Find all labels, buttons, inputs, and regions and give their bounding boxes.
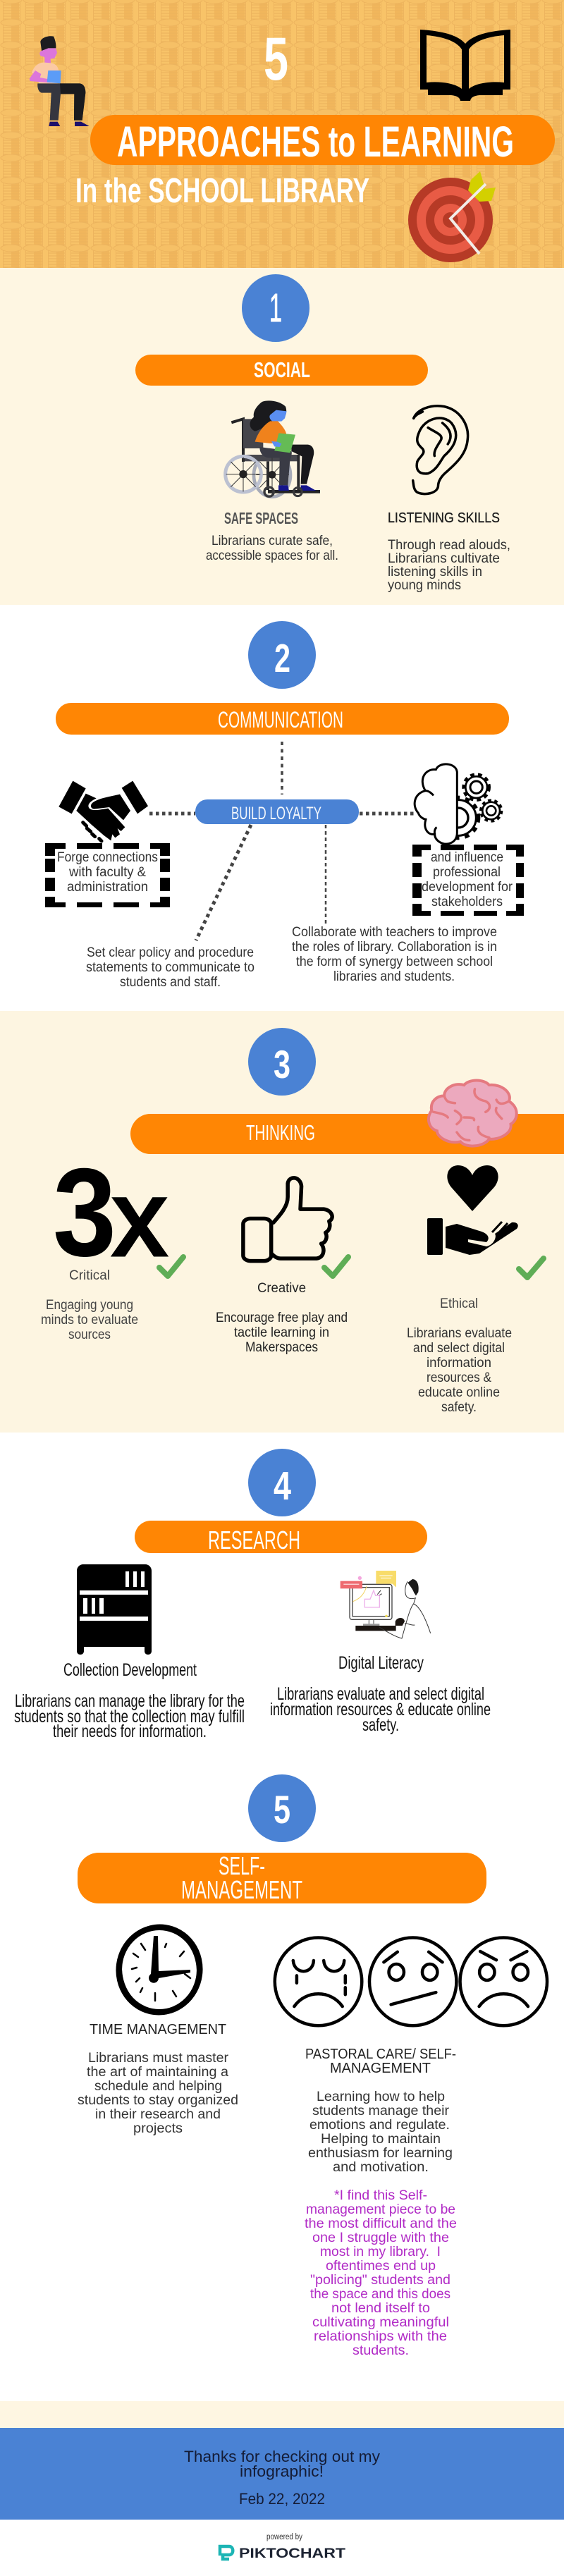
purple reflection note: not lend itself to xyxy=(331,2300,430,2316)
text: collection development xyxy=(14,1660,245,1741)
dotted connectors xyxy=(149,742,415,940)
text: pastoral care: Helping to maintain xyxy=(321,2132,441,2147)
number badge 4: 4 xyxy=(274,1464,291,1509)
text: pastoral care: PASTORAL CARE/ SELF- xyxy=(305,2047,456,2062)
purple reflection note: oftentimes end up xyxy=(326,2258,436,2274)
text: ethical: resources & xyxy=(427,1370,491,1385)
text: ethical: educate online xyxy=(418,1385,500,1400)
number badge 2: 2 xyxy=(274,636,290,681)
icon: heart in hand xyxy=(427,1165,518,1255)
check mark 1 xyxy=(159,1257,183,1276)
icon: person in wheelchair xyxy=(226,400,320,497)
powered by piktochart xyxy=(220,2533,345,2561)
panel: 5 self-management xyxy=(78,1774,547,2358)
panel: 1 social xyxy=(135,274,510,593)
icon: angry face xyxy=(460,1937,547,2025)
purple reflection note: one I struggle with the xyxy=(312,2230,449,2245)
purple reflection note: the most difficult and the xyxy=(305,2216,457,2231)
text: digital literacy xyxy=(270,1653,491,1735)
icon: clock xyxy=(111,1920,207,2020)
panel: 3 thinking xyxy=(41,1028,564,1415)
text: critical xyxy=(41,1268,138,1342)
text: set clear policy: statements to communicate to xyxy=(86,960,255,975)
heading pill: social xyxy=(135,355,428,386)
illustration: person at computer xyxy=(341,1571,431,1638)
dashed box: professional development: and influence xyxy=(431,850,503,865)
item: safe spaces: accessible spaces for all. xyxy=(206,548,338,563)
text: set clear policy xyxy=(86,945,255,990)
icon: open book xyxy=(420,30,510,101)
hub pill: build loyalty xyxy=(195,799,359,824)
icon: brain and gears xyxy=(415,764,501,844)
dashed box: forge connections xyxy=(45,843,170,907)
panel: footer thanks: infographic! xyxy=(240,2462,324,2480)
text: critical: Critical xyxy=(69,1268,110,1283)
icon: person with tablet xyxy=(30,36,90,126)
heading pill: communication: COMMUNICATION xyxy=(218,707,343,732)
purple reflection note: most in my library. I xyxy=(320,2244,441,2259)
panel: 4 research xyxy=(14,1449,491,1741)
text: creative: Creative xyxy=(257,1281,306,1296)
number badge 5 xyxy=(248,1774,316,1842)
purple reflection note: students. xyxy=(352,2343,409,2358)
text: time management: in their research and xyxy=(95,2107,221,2122)
dashed box: forge connections: administration xyxy=(67,880,148,895)
icon: sad crying face xyxy=(275,1937,362,2025)
text: creative: Encourage free play and xyxy=(216,1311,348,1325)
heading pill: research: RESEARCH xyxy=(208,1526,300,1554)
number badge 4 xyxy=(248,1449,316,1516)
text: collection development: students so that the collection may fulfill xyxy=(14,1707,245,1726)
check mark 3 xyxy=(519,1258,544,1277)
icon: piktochart logo xyxy=(220,2546,233,2559)
text: ethical: information xyxy=(427,1356,491,1370)
text: collection development: Librarians can manage the library for the xyxy=(15,1691,245,1711)
text: set clear policy: students and staff. xyxy=(120,975,221,990)
purple reflection note xyxy=(305,2188,457,2358)
text: collaborate with teachers: the form of synergy between school xyxy=(296,955,493,969)
panel: footer thanks xyxy=(0,2428,564,2520)
powered by piktochart: PIKTOCHART xyxy=(239,2546,345,2561)
icon: worried face xyxy=(369,1937,456,2025)
text: collaborate with teachers: the roles of library. Collaboration is in xyxy=(292,940,497,955)
item: listening skills: listening skills in xyxy=(388,565,482,579)
item: listening skills: LISTENING SKILLS xyxy=(388,510,500,526)
text: time management xyxy=(78,2022,238,2136)
text: pastoral care: and motivation. xyxy=(333,2160,429,2175)
text: digital literacy: Librarians evaluate and select digital xyxy=(277,1684,484,1704)
text: digital literacy: safety. xyxy=(362,1715,399,1735)
purple reflection note: cultivating meaningful xyxy=(312,2314,449,2330)
purple reflection note: management piece to be xyxy=(306,2202,455,2217)
icon: 3x: x xyxy=(113,1159,166,1277)
panel: 2 communication xyxy=(45,621,524,990)
panel: footer thanks: Feb 22, 2022 xyxy=(239,2490,325,2508)
text: time management: schedule and helping xyxy=(94,2079,222,2094)
icon: bookshelf xyxy=(77,1564,152,1655)
subtitle: In the SCHOOL LIBRARY xyxy=(75,172,369,210)
text: ethical: safety. xyxy=(441,1400,477,1415)
item: safe spaces xyxy=(206,509,338,563)
purple reflection note: "policing" students and xyxy=(310,2272,450,2288)
number badge 2 xyxy=(248,621,316,689)
dashed box: professional development: professional xyxy=(433,865,501,880)
text: time management: Librarians must master xyxy=(88,2051,229,2066)
item: safe spaces: SAFE SPACES xyxy=(224,509,298,527)
text: collection development: Collection Development xyxy=(63,1660,197,1680)
text: pastoral care: emotions and regulate. xyxy=(309,2118,450,2133)
item: listening skills xyxy=(388,510,510,593)
text: collection development: their needs for information. xyxy=(53,1722,207,1741)
text: pastoral care xyxy=(305,2047,456,2175)
purple reflection note: the space and this does xyxy=(310,2286,450,2302)
heading pill: self-management: SELF- xyxy=(219,1851,265,1880)
heading pill: thinking xyxy=(130,1114,564,1154)
icon: handshake xyxy=(59,781,148,841)
purple reflection note: *I find this Self- xyxy=(334,2188,427,2203)
text: time management: TIME MANAGEMENT xyxy=(90,2022,226,2037)
text: ethical: Librarians evaluate xyxy=(407,1326,512,1341)
number badge 3 xyxy=(248,1028,316,1096)
text: creative: Makerspaces xyxy=(245,1340,318,1355)
text: creative: tactile learning in xyxy=(234,1325,329,1340)
text: collaborate with teachers xyxy=(292,925,497,984)
text: pastoral care: Learning how to help xyxy=(317,2090,445,2104)
item: listening skills: Librarians cultivate xyxy=(388,551,500,566)
text: collaborate with teachers: Collaborate with teachers to improve xyxy=(292,925,497,940)
icon: 3x xyxy=(53,1142,166,1282)
item: listening skills: young minds xyxy=(388,578,461,593)
text: digital literacy: Digital Literacy xyxy=(338,1653,424,1673)
icon: 3x: 3 xyxy=(53,1142,116,1282)
text: critical: minds to evaluate xyxy=(41,1313,138,1327)
icon: target with arrow xyxy=(408,171,496,262)
heading pill: social: SOCIAL xyxy=(254,357,310,382)
text: ethical xyxy=(407,1296,512,1415)
dashed box: professional development: development for xyxy=(422,880,513,895)
number badge 1: 1 xyxy=(269,286,282,331)
number badge 1 xyxy=(242,274,309,342)
text: pastoral care: enthusiasm for learning xyxy=(308,2146,453,2161)
text: collaborate with teachers: libraries and students. xyxy=(333,969,455,984)
text: creative xyxy=(216,1281,348,1355)
dashed box: forge connections: Forge connections xyxy=(57,850,158,865)
item: safe spaces: Librarians curate safe, xyxy=(212,534,333,548)
number badge 5: 5 xyxy=(274,1787,290,1832)
heading pill: thinking: THINKING xyxy=(246,1120,315,1145)
text: critical: Engaging young xyxy=(46,1298,133,1313)
text: pastoral care: students manage their xyxy=(312,2104,450,2118)
powered by piktochart: powered by xyxy=(266,2533,302,2541)
icon: pink brain xyxy=(429,1080,517,1146)
hub pill: build loyalty: BUILD LOYALTY xyxy=(231,804,321,823)
item: listening skills: Through read alouds, xyxy=(388,538,510,553)
dashed box: professional development xyxy=(412,845,524,916)
text: critical: sources xyxy=(68,1327,111,1342)
icon: ear xyxy=(413,406,468,494)
heading pill: communication xyxy=(56,703,509,735)
text: ethical: and select digital xyxy=(413,1341,505,1356)
purple reflection note: relationships with the xyxy=(314,2329,447,2344)
big numeral 5: 5 xyxy=(264,25,288,93)
text: pastoral care: MANAGEMENT xyxy=(330,2061,431,2076)
text: set clear policy: Set clear policy and procedure xyxy=(87,945,254,960)
heading pill: self-management: MANAGEMENT xyxy=(181,1875,302,1904)
heading pill: self-management xyxy=(78,1851,486,1904)
title pill xyxy=(90,115,555,165)
number badge 3: 3 xyxy=(274,1042,290,1086)
check mark 2 xyxy=(324,1257,348,1276)
text: time management: the art of maintaining a xyxy=(87,2065,228,2080)
heading pill: research xyxy=(135,1521,427,1554)
text: time management: projects xyxy=(133,2121,183,2136)
dashed box: forge connections: with faculty & xyxy=(68,865,146,880)
panel: header banner xyxy=(0,0,564,268)
text: time management: students to stay organized xyxy=(78,2093,238,2108)
icon: thumbs up xyxy=(243,1178,332,1261)
text: ethical: Ethical xyxy=(440,1296,478,1311)
panel: footer thanks: Thanks for checking out my xyxy=(184,2448,380,2465)
dashed box: professional development: stakeholders xyxy=(431,895,503,909)
